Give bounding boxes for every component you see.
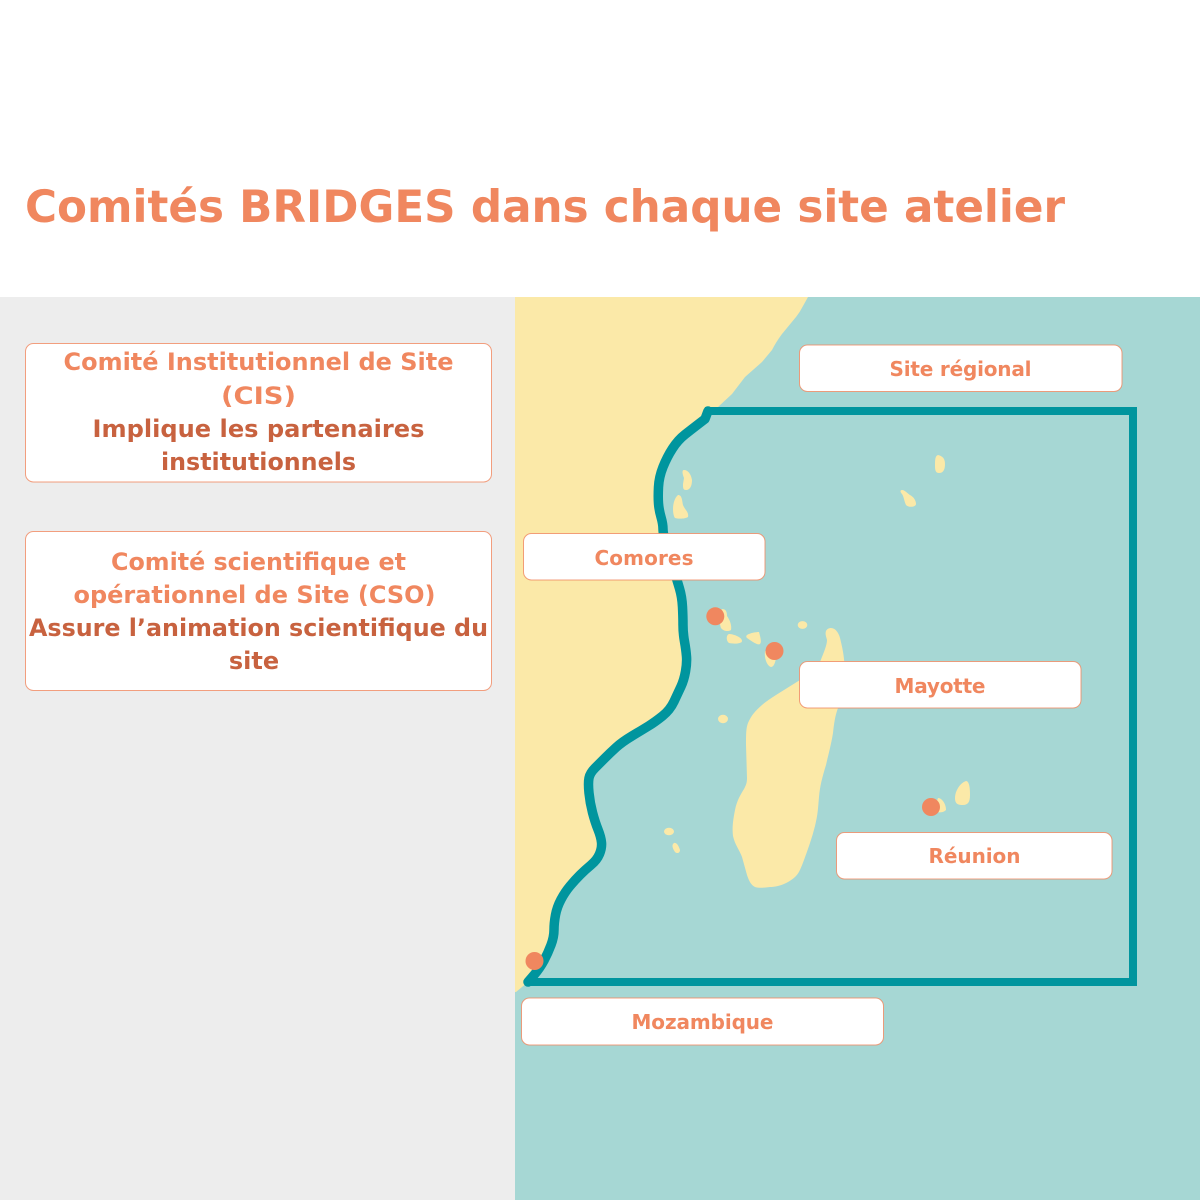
panel: map [515, 297, 1200, 1200]
panel: CSO: opérationnel de Site (CSO) [74, 581, 436, 609]
panel: CIS: institutionnels [161, 448, 356, 476]
pin: Mozambique [526, 952, 544, 970]
panel: CIS: Comité Institutionnel de Site [64, 348, 454, 376]
label: Comores [524, 534, 765, 580]
label: Réunion: Réunion [928, 844, 1020, 868]
label: Site régional [800, 345, 1122, 392]
panel: CSO: site [229, 647, 279, 675]
regional site boundary line [526, 411, 1133, 982]
label: Mayotte [800, 662, 1081, 708]
panel: CSO: Comité scientifique et [111, 548, 406, 576]
panel: CIS: (CIS) [221, 382, 296, 410]
map Madagascar [733, 628, 845, 888]
islands [664, 455, 970, 853]
map sea [515, 297, 1200, 1200]
label: Mayotte: Mayotte [894, 674, 986, 698]
label: Comores: Comores [594, 546, 694, 570]
map mainland Africa [515, 297, 808, 992]
panel: CSO [26, 532, 492, 690]
label: Site régional: Site régional [890, 357, 1032, 381]
panel: CSO: Assure l’animation scientifique du [29, 614, 488, 642]
panel: left grey background [0, 297, 515, 1200]
label: Mozambique [522, 998, 884, 1045]
pin: Mayotte [766, 642, 784, 660]
label: Réunion [836, 832, 1112, 879]
label: Mozambique: Mozambique [632, 1010, 774, 1034]
panel: CIS: Implique les partenaires [92, 415, 424, 443]
title: Comités BRIDGES dans chaque site atelier [25, 182, 1065, 233]
pin: Réunion [922, 798, 940, 816]
pin: Comores [706, 607, 724, 625]
panel: CIS [26, 344, 492, 482]
